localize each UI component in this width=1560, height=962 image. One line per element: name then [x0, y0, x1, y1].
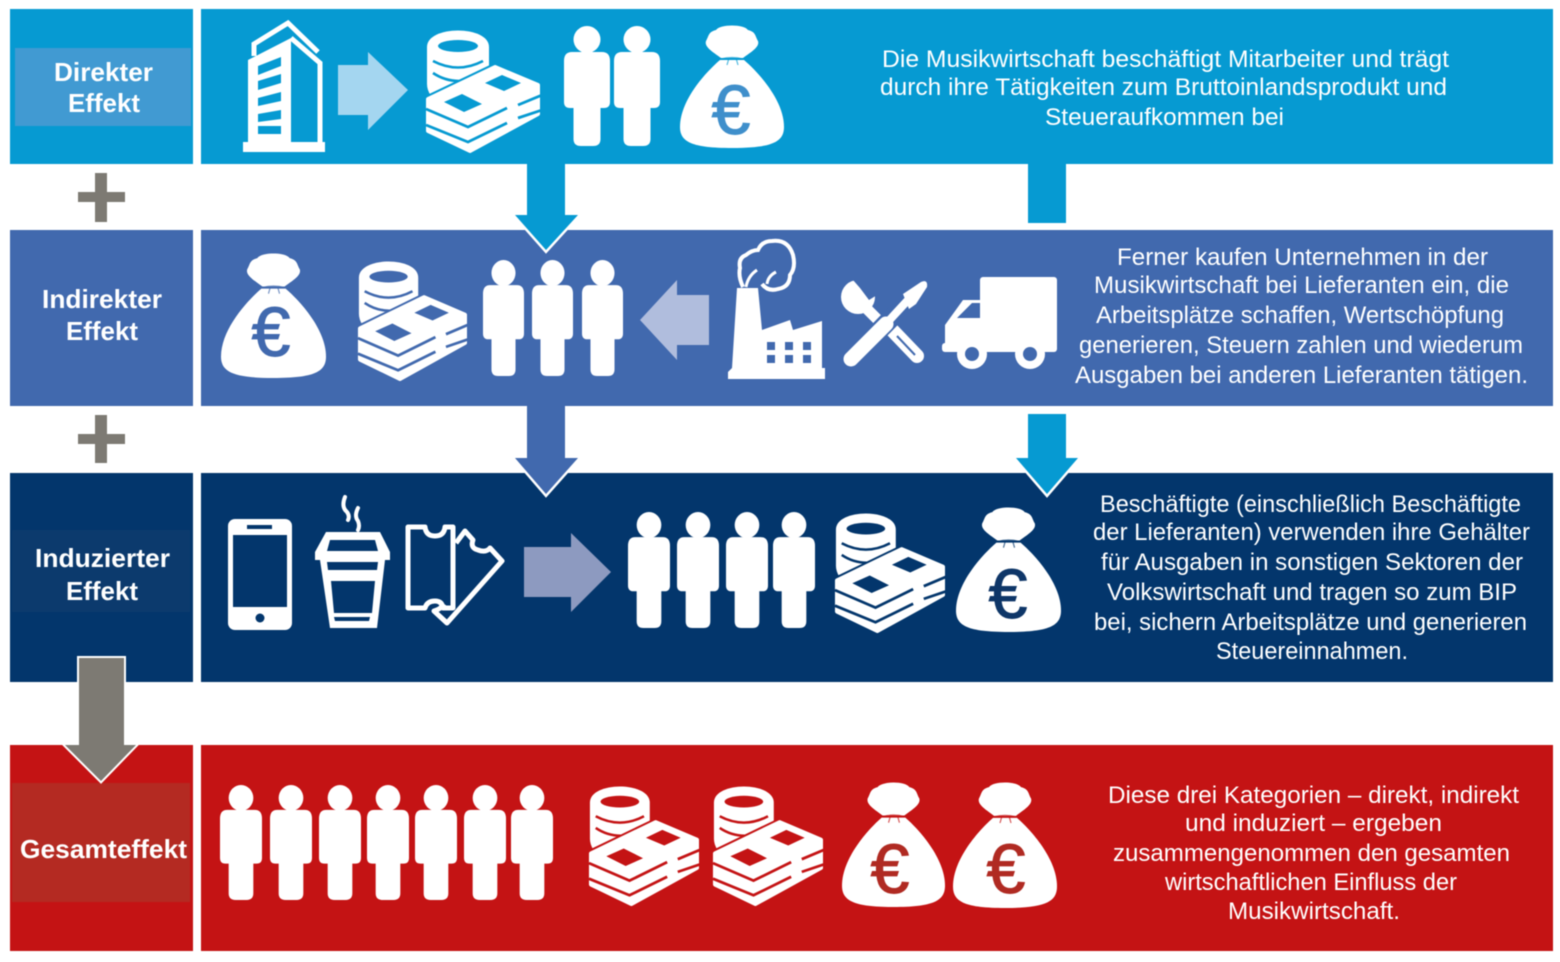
text: total effect description: und induziert – ergeben: [1185, 810, 1442, 837]
text: total effect description: zusammengenommen den gesamten: [1113, 840, 1510, 867]
icon: coffee cup: [315, 497, 390, 628]
icon: money bag one: [842, 783, 945, 908]
icon: money stack one: [589, 786, 701, 904]
text: induced effect description: für Ausgaben in sonstigen Sektoren der: [1101, 549, 1523, 576]
panel: direct effect: [10, 9, 1553, 164]
icon: money stack: [426, 30, 542, 151]
label: Induzierter Effekt: Induzierter: [35, 543, 170, 573]
text: indirect effect description: generieren, Steuern zahlen und wiederum: [1079, 332, 1523, 359]
text: indirect effect description: Musikwirtschaft bei Lieferanten ein, die: [1094, 272, 1509, 299]
text: total effect description: Diese drei Kategorien – direkt, indirekt: [1108, 782, 1519, 809]
icon: money bag: €: [252, 293, 290, 371]
arrow: to money: [338, 52, 408, 130]
arrow: direct to indirect: [515, 163, 578, 250]
icon: two people: [564, 26, 660, 146]
arrow: from suppliers: [640, 280, 709, 360]
label: Gesamteffekt: [12, 783, 190, 902]
icon: money bag: [221, 254, 326, 378]
label: Induzierter Effekt: [12, 530, 190, 612]
label: Indirekter Effekt: Effekt: [66, 316, 138, 346]
icon: money stack: [835, 513, 947, 631]
icon: money bag two: €: [987, 830, 1025, 908]
icon: money bag: €: [989, 555, 1027, 633]
plus sign 2: [78, 415, 125, 463]
label: Direkter Effekt: Direkter: [54, 57, 153, 87]
text: induced effect description: Beschäftigte (einschließlich Beschäftigte: [1100, 491, 1521, 518]
plus sign 1: [78, 173, 125, 222]
text: induced effect description: bei, sichern Arbeitsplätze und generieren: [1094, 609, 1527, 636]
text: indirect effect description: Ferner kaufen Unternehmen in der: [1117, 244, 1488, 271]
arrow: to effects: [524, 533, 611, 612]
label: Gesamteffekt: Gesamteffekt: [20, 834, 187, 864]
text: total effect description: [1108, 782, 1519, 925]
text: induced effect description: [1093, 491, 1530, 665]
icon: money bag: [956, 508, 1061, 633]
text: induced effect description: Volkswirtschaft und tragen so zum BIP: [1107, 579, 1517, 606]
panel: total effect: [10, 745, 1553, 951]
text: indirect effect description: Arbeitsplätze schaffen, Wertschöpfung: [1096, 302, 1504, 329]
arrow: direct stub right: [1028, 163, 1066, 223]
text: direct effect description: [880, 46, 1449, 131]
icon: money stack: [358, 261, 469, 379]
arrow: induced to total: [65, 658, 136, 781]
text: indirect effect description: Ausgaben bei anderen Lieferanten tätigen.: [1075, 362, 1528, 389]
arrow: indirect to induced: [515, 405, 578, 494]
label: Direkter Effekt: Effekt: [68, 88, 140, 118]
text: induced effect description: der Lieferanten) verwenden ihre Gehälter: [1093, 519, 1530, 546]
icon: three people: [483, 260, 623, 376]
icon: smartphone: [228, 519, 292, 630]
icon: money bag: €: [712, 71, 750, 149]
panel: induced effect: [10, 473, 1553, 682]
text: indirect effect description: [1075, 244, 1528, 389]
arrow: direct to induced right: [1016, 414, 1078, 494]
text: direct effect description: Die Musikwirtschaft beschäftigt Mitarbeiter und trägt: [882, 46, 1449, 73]
icon: money stack two: [713, 786, 825, 904]
icon: money bag: [680, 26, 784, 149]
label: Induzierter Effekt: Effekt: [66, 576, 138, 606]
text: induced effect description: Steuereinnahmen.: [1216, 638, 1408, 665]
icon: four people: [628, 512, 815, 628]
icon: tools: [841, 274, 927, 359]
label: Direkter Effekt: [15, 48, 191, 126]
icon: ticket: [408, 527, 502, 623]
icon: factory: [728, 241, 825, 379]
text: total effect description: wirtschaftlichen Einfluss der: [1164, 869, 1457, 896]
text: direct effect description: durch ihre Tätigkeiten zum Bruttoinlandsprodukt und: [880, 74, 1447, 101]
text: total effect description: Musikwirtschaft.: [1228, 898, 1400, 925]
label: Indirekter Effekt: Indirekter: [42, 284, 162, 314]
panel: indirect effect: [10, 230, 1553, 406]
icon: delivery truck: [942, 277, 1057, 369]
icon: money bag one: €: [871, 830, 909, 908]
icon: seven people: [220, 785, 553, 900]
icon: office building: [243, 23, 325, 152]
text: direct effect description: Steueraufkommen bei: [1045, 104, 1284, 131]
label: Indirekter Effekt: [42, 284, 162, 346]
icon: money bag two: [953, 783, 1057, 908]
